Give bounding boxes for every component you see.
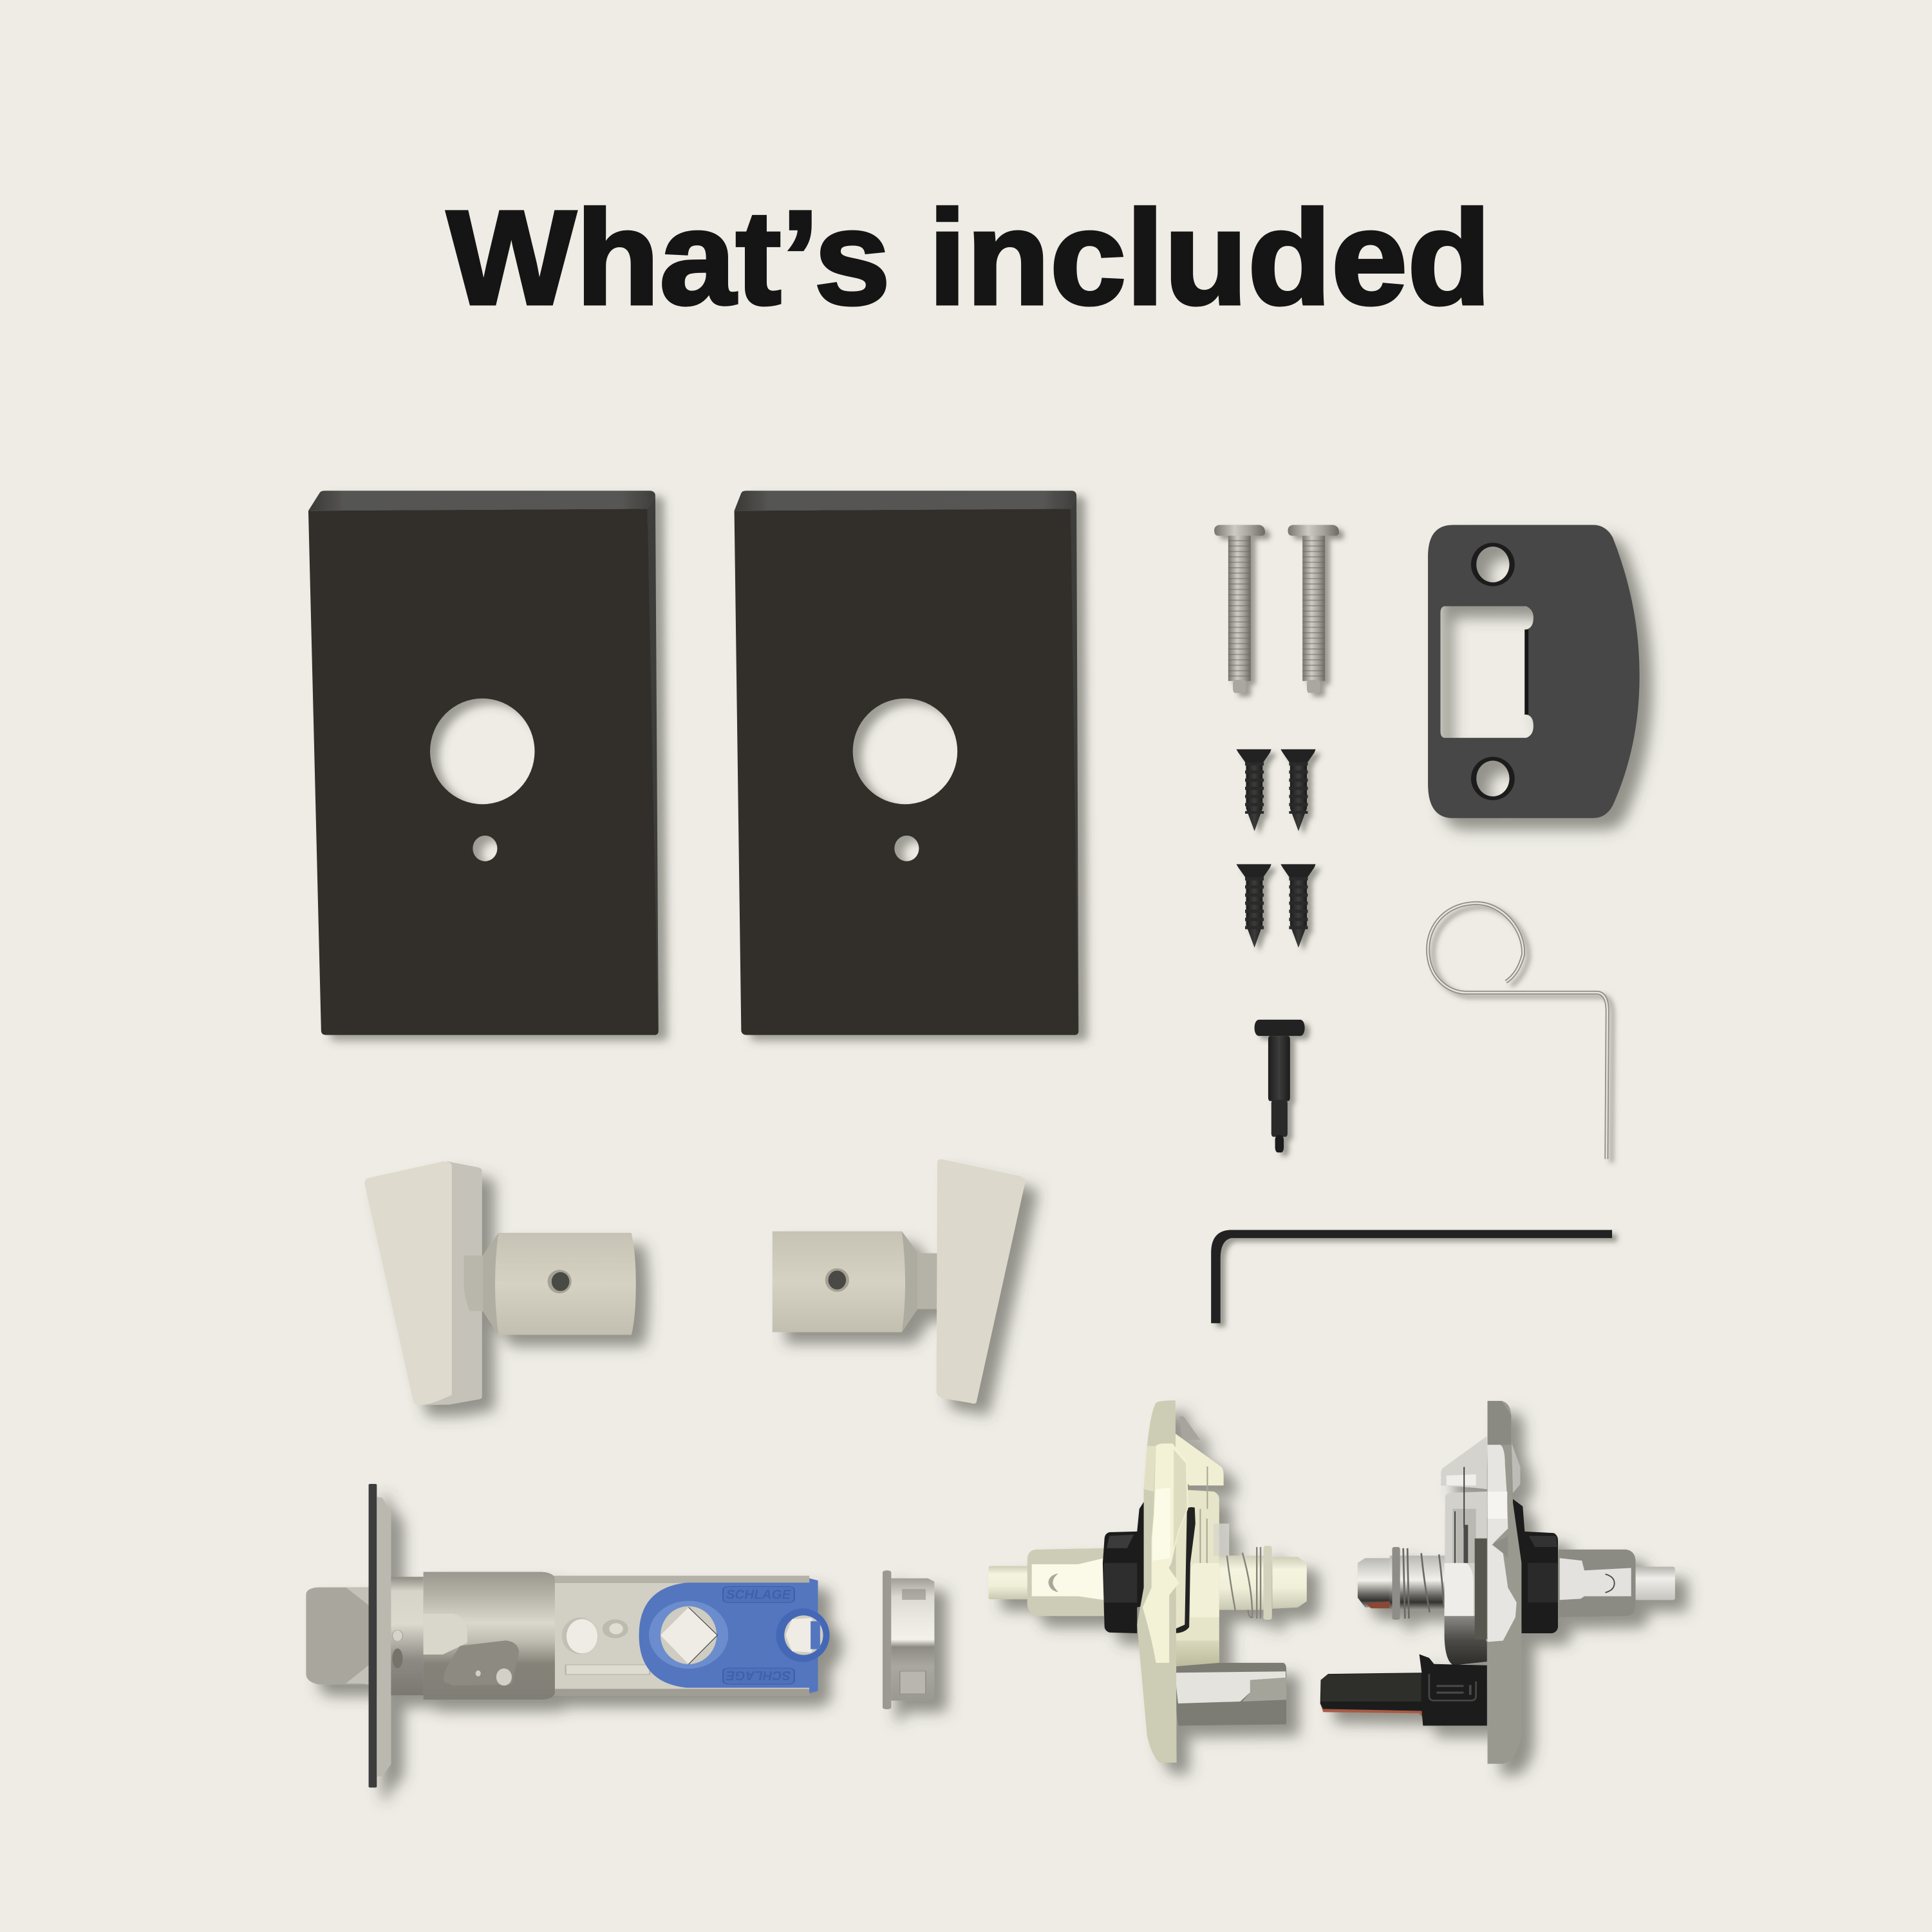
machine screw 1 — [1214, 525, 1265, 693]
left cream assembly — [988, 1400, 1307, 1763]
wood screw bottom left — [1236, 864, 1271, 948]
left lever handle — [364, 1161, 636, 1405]
blue shipping clip: SCHLAGE — [726, 1669, 791, 1683]
face plate — [369, 1484, 391, 1788]
black collar — [1103, 1500, 1147, 1633]
drive stem — [988, 1548, 1104, 1616]
title: What’s included — [447, 183, 1491, 333]
blue shipping clip — [639, 1579, 830, 1693]
wood screw top left — [1236, 749, 1271, 831]
black wood screws — [1236, 749, 1316, 948]
latch housing — [424, 1572, 809, 1700]
right silver assembly — [1320, 1401, 1675, 1764]
drive stem — [1559, 1550, 1675, 1617]
latch — [306, 1484, 830, 1788]
cover plate right — [735, 491, 1078, 1035]
right lever handle — [773, 1159, 1025, 1403]
black pin screw — [1255, 1020, 1305, 1152]
panel: black cover plates — [308, 491, 1078, 1035]
black collar — [1513, 1499, 1558, 1633]
cover plate left — [308, 491, 659, 1035]
latch nut — [883, 1570, 934, 1709]
machine screw 2 — [1288, 525, 1339, 693]
wood screw bottom right — [1280, 864, 1316, 948]
panel: lever handles — [364, 1159, 1025, 1405]
spindle with spring — [1358, 1547, 1445, 1620]
bottom post — [1174, 1663, 1286, 1725]
wiring connector — [1320, 1654, 1487, 1725]
wire tool — [1428, 903, 1608, 1159]
panel: interior and exterior mounting plates — [988, 1400, 1675, 1764]
spindle with spring — [1219, 1546, 1307, 1620]
latch bolt — [306, 1588, 369, 1685]
cream face piece — [1143, 1443, 1188, 1663]
chrome bracket and body — [1441, 1436, 1487, 1665]
strike plate — [1428, 525, 1640, 818]
blue shipping clip: SCHLAGE — [726, 1586, 791, 1602]
wood screw top right — [1280, 749, 1316, 831]
panel: fasteners and small hardware — [1211, 525, 1640, 1323]
chrome face piece — [1488, 1443, 1520, 1642]
hex key — [1211, 1230, 1612, 1323]
panel: latch assembly — [306, 1484, 934, 1788]
